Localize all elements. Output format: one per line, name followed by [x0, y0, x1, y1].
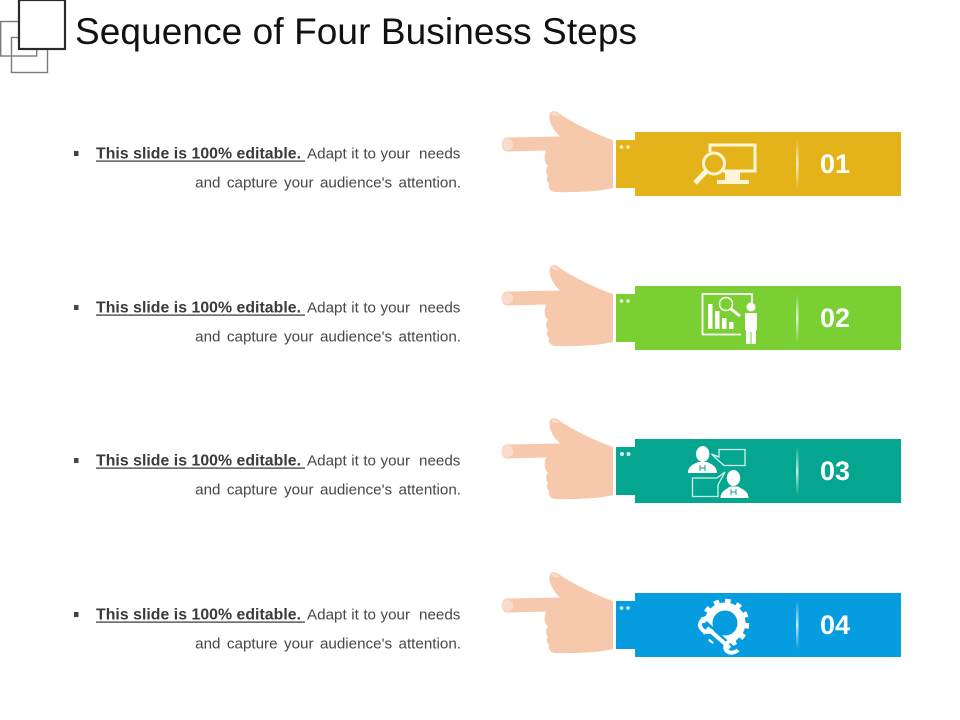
text block: step 2: needs	[419, 300, 461, 316]
icon: pointing hand	[502, 418, 613, 499]
panel: step 3	[502, 418, 901, 503]
text block: step 1: needs	[419, 146, 461, 162]
icon: monitor with magnifier	[695, 145, 755, 184]
number: 02	[820, 303, 850, 333]
icon: two people talking	[688, 446, 748, 498]
text block: step 4: needs	[419, 606, 461, 624]
icon: pointing hand	[502, 265, 613, 346]
text block: step 2: and capture your audience's attention.	[195, 328, 461, 346]
title: Sequence of Four Business Steps	[75, 11, 637, 52]
text block: step 4: Adapt it to your	[307, 606, 410, 624]
icon: pointing hand	[502, 111, 613, 192]
icon: pointing hand	[502, 572, 613, 653]
cuff and bar	[616, 439, 901, 503]
text block: step 1: This slide is 100% editable.	[96, 146, 301, 162]
cuff and bar	[616, 593, 901, 657]
number: 01	[820, 149, 850, 179]
text block: step 3: This slide is 100% editable.	[96, 452, 301, 470]
panel: step 1	[502, 111, 901, 196]
text block: step 2: This slide is 100% editable.	[96, 300, 301, 316]
text block: step 4: This slide is 100% editable.	[96, 606, 301, 624]
text block: step 1: Adapt it to your	[307, 146, 410, 162]
icon: gear and wrench	[700, 601, 747, 653]
text block: step 4	[74, 606, 461, 652]
text block: step 1: and capture your audience's attention.	[195, 174, 461, 192]
text block: step 3	[74, 452, 461, 498]
text block: step 1	[74, 146, 461, 192]
text block: step 4: and capture your audience's attention.	[195, 636, 461, 652]
text block: step 3: Adapt it to your	[307, 452, 410, 470]
panel: step 4	[502, 572, 901, 657]
text block: step 3: and capture your audience's attention.	[195, 482, 461, 498]
text block: step 2: Adapt it to your	[307, 300, 410, 316]
text block: step 2	[74, 300, 461, 346]
icon: presenter with chart	[702, 294, 757, 344]
panel: step 2	[502, 265, 901, 350]
text block: step 3: needs	[419, 452, 461, 470]
number: 03	[820, 456, 850, 486]
icon: overlapping squares logo	[1, 0, 65, 72]
number: 04	[820, 610, 850, 640]
cuff and bar	[616, 132, 901, 196]
cuff and bar	[616, 286, 901, 350]
